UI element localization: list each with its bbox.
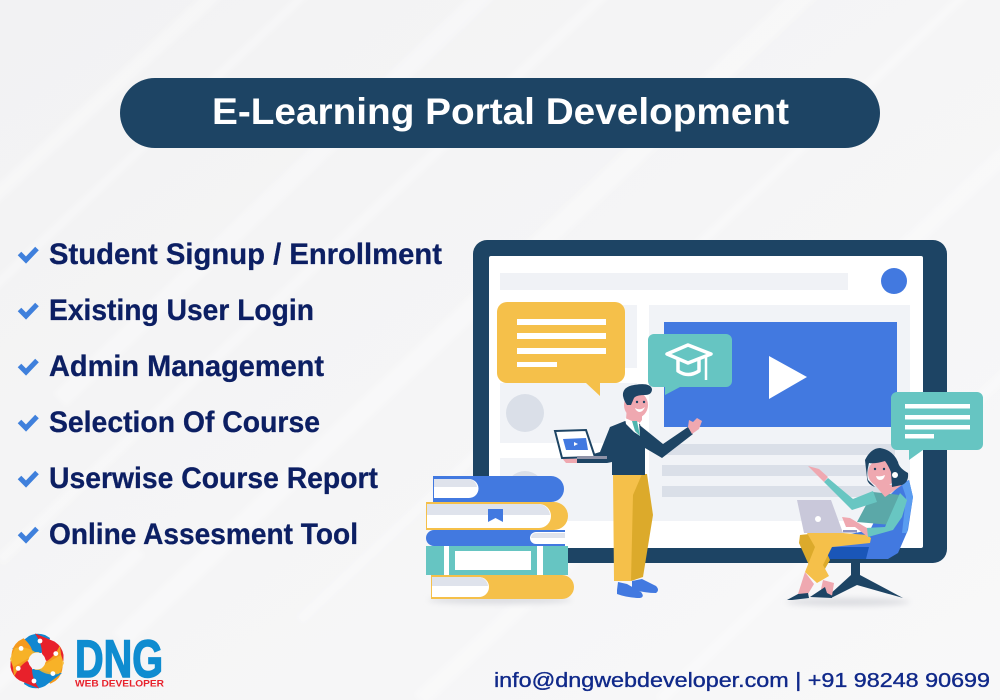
speech bubble: graduation cap — [648, 334, 732, 395]
item: admin management: Admin Management — [49, 350, 324, 383]
feet — [798, 572, 814, 594]
item: userwise course report: Userwise Course Report — [49, 462, 378, 495]
chair stand — [828, 559, 903, 598]
front leg — [805, 533, 871, 583]
arm — [824, 478, 877, 510]
video player — [664, 322, 897, 427]
shoes — [632, 579, 658, 593]
item: existing user login: Existing User Login — [49, 294, 314, 327]
hair — [623, 384, 652, 405]
torso — [857, 492, 900, 525]
back leg — [799, 533, 830, 583]
logo mark — [1, 626, 73, 696]
laptop — [555, 430, 607, 459]
item: online assessment tool: Online Assesment Tool — [49, 518, 358, 551]
speech bubble: teal — [891, 392, 983, 460]
contact line: info@dngwebdeveloper.com | +91 98248 90699 — [494, 670, 990, 692]
icon: profile dot — [881, 268, 907, 294]
illustration: monitor — [473, 240, 947, 563]
illustration: stack of books — [426, 476, 574, 604]
trousers — [631, 474, 653, 581]
book: yellow with bookmark — [426, 502, 568, 530]
illustration: standing man — [555, 384, 702, 598]
speech bubble: yellow — [497, 302, 625, 396]
book: blue slim — [426, 530, 565, 546]
icon: graduation cap — [667, 345, 711, 380]
logo wordmark: DNG — [75, 630, 163, 689]
book: teal — [426, 546, 568, 575]
title: E-Learning Portal Development — [212, 91, 789, 132]
neck and collar — [626, 405, 642, 430]
book: yellow bottom — [431, 575, 574, 599]
feature checklist — [20, 238, 442, 551]
title banner — [120, 78, 880, 148]
chair — [820, 480, 913, 559]
head — [875, 485, 902, 497]
item: selection of course: Selection Of Course — [49, 406, 320, 439]
illustration: seated woman — [786, 448, 913, 606]
item: student signup: Student Signup / Enrollment — [49, 238, 442, 271]
logo — [1, 626, 164, 696]
laptop — [797, 500, 857, 533]
hair — [865, 448, 908, 487]
head — [624, 392, 648, 418]
sweater — [577, 421, 645, 475]
hand — [688, 418, 702, 434]
logo tagline: WEB DEVELOPER — [75, 678, 164, 690]
shoes — [787, 593, 809, 600]
book: blue top — [433, 476, 564, 502]
